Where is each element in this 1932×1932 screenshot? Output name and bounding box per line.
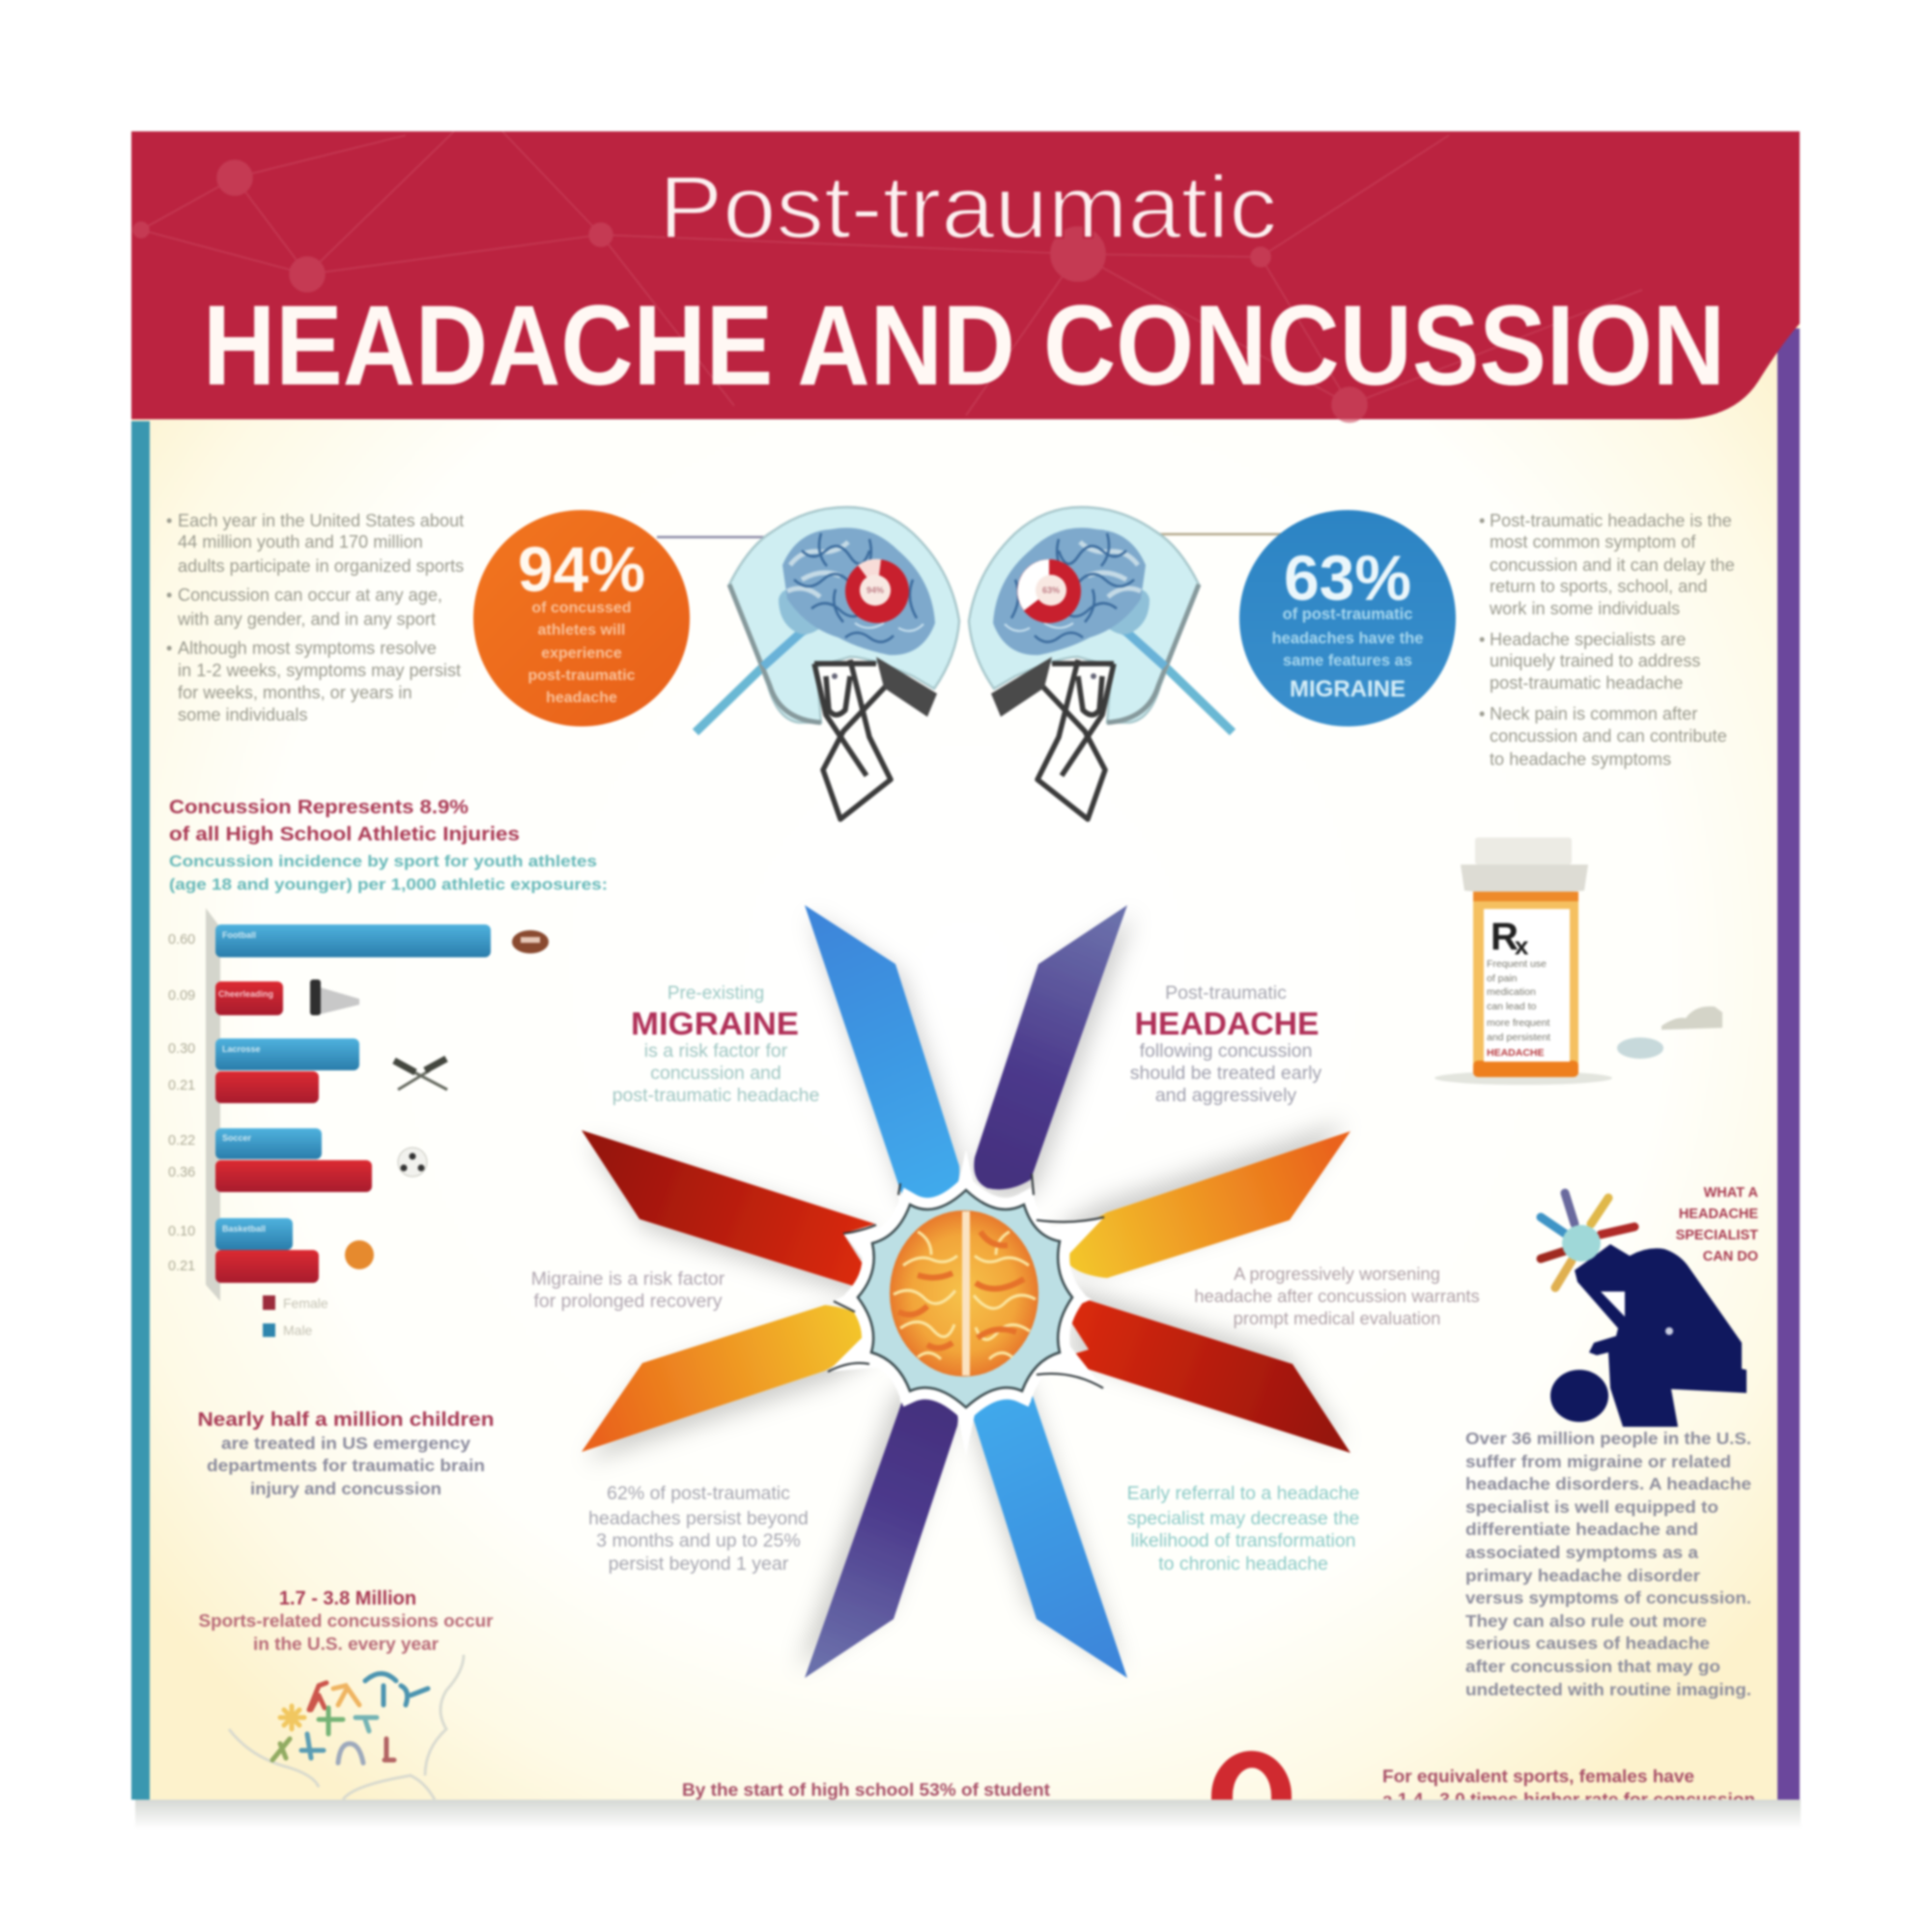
label text: medication (1487, 986, 1536, 998)
left bullet list: • (166, 585, 172, 605)
ray: right orange (1065, 1131, 1350, 1278)
title: Post-traumatic (659, 158, 1277, 257)
text: pre-existing migraine: Pre-existing (668, 983, 764, 1004)
text: post-traumatic headache (1130, 982, 1321, 1106)
right helmet donut 63%: 63% (1042, 585, 1060, 595)
small burst rays (1541, 1193, 1634, 1288)
orange stat circle: of concussed (531, 600, 632, 616)
text: prolonged recovery: for prolonged recovery (533, 1291, 723, 1312)
bar names: Cheerleading (218, 989, 273, 999)
blue stat circle (1239, 510, 1456, 726)
left bullet list: • (166, 511, 172, 530)
ray: right red (1057, 1295, 1350, 1453)
bar names: Basketball (222, 1224, 266, 1234)
right helmet with brain (969, 507, 1233, 819)
bottom text: females: a 1.4 - 3.0 times higher rate for concussion (1382, 1790, 1755, 1809)
burst (828, 1150, 1104, 1456)
text: persistence: 3 months and up to 25% (596, 1530, 801, 1551)
text: early referral: Early referral to a headache (1127, 1483, 1359, 1504)
left bullet list: with any gender, and in any sport (177, 610, 436, 629)
value labels: 0.22 (168, 1133, 195, 1149)
text: 1.7 to 3.8 million: in the U.S. every year (253, 1634, 439, 1654)
right bullet list: concussion and it can delay the (1490, 555, 1735, 575)
specialist paragraph: headache disorders. A headache (1465, 1474, 1751, 1493)
left bullet list: • (166, 639, 172, 658)
blue stat circle: headaches have the (1272, 630, 1423, 647)
orange stat circle (473, 510, 690, 726)
right bullet list: • (1479, 704, 1485, 724)
label text: more frequent (1487, 1017, 1549, 1029)
bar names: Lacrosse (222, 1044, 261, 1054)
value labels: 0.21 (168, 1259, 195, 1274)
star diagram (582, 905, 1350, 1678)
right bullet list: • (1479, 630, 1485, 649)
right bullet list: Post-traumatic headache is the (1490, 511, 1732, 530)
chart axis (206, 908, 220, 1301)
right bullet list (1479, 511, 1735, 769)
right bullet list: return to sports, school, and (1490, 577, 1707, 596)
ray: upper-right purple (974, 905, 1127, 1189)
text: worsening headache: headache after concussion warrants (1194, 1286, 1480, 1306)
right bullet list: to headache symptoms (1490, 750, 1671, 769)
blue stat circle: same features as (1283, 652, 1412, 669)
left helmet donut 94% (845, 559, 909, 623)
right helmet donut 63% (1017, 559, 1081, 623)
text: persistence: 62% of post-traumatic (607, 1483, 790, 1504)
text: persistence (588, 1483, 809, 1575)
left bullet list: in 1-2 weeks, symptoms may persist (178, 661, 461, 680)
label text (1487, 958, 1550, 1059)
text: half a million children: injury and concussion (250, 1479, 441, 1498)
bottom text: high school: By the start of high school 53% of student (682, 1780, 1050, 1800)
left bullet list: some individuals (178, 705, 307, 724)
right bullet list: work in some individuals (1489, 599, 1680, 618)
left bullet list: for weeks, months, or years in (178, 683, 412, 702)
left teal bar (131, 421, 150, 1800)
bar names: Football (222, 930, 256, 940)
icon: soccer ball (398, 1148, 427, 1177)
text: persistence: headaches persist beyond (588, 1508, 809, 1529)
label text: and persistent (1487, 1032, 1550, 1043)
specialist paragraph: differentiate headache and (1465, 1520, 1698, 1539)
bottom text: females (1382, 1767, 1755, 1809)
panel shadow (135, 1800, 1801, 1829)
text: half a million children: Nearly half a million children (197, 1409, 495, 1431)
text: 1.7 to 3.8 million (199, 1588, 493, 1654)
athlete figures (272, 1673, 428, 1763)
title (208, 172, 1720, 387)
icon: lacrosse sticks (394, 1059, 447, 1090)
ray: lower-left purple (805, 1394, 958, 1678)
bar chart (168, 908, 549, 1338)
right bullet list: • (1479, 511, 1485, 530)
text: post-traumatic headache: and aggressively (1155, 1085, 1296, 1106)
text: half a million children: departments for traumatic brain (207, 1456, 485, 1475)
right bullet list: Neck pain is common after (1490, 704, 1697, 724)
text: pre-existing migraine: post-traumatic headache (612, 1085, 819, 1106)
bars (215, 924, 491, 1283)
specialist paragraph: primary headache disorder (1465, 1566, 1700, 1585)
right bullet list: uniquely trained to address (1490, 651, 1700, 670)
text: pre-existing migraine: concussion and (650, 1063, 781, 1084)
text: half a million children: are treated in US emergency (221, 1434, 470, 1453)
text: pre-existing migraine (612, 983, 819, 1106)
specialist heading (1676, 1185, 1759, 1264)
ray: left orange (582, 1305, 867, 1452)
label text: can lead to (1487, 1001, 1537, 1012)
icon: silhouette with headache burst (1541, 1193, 1747, 1427)
header network pattern (133, 131, 1642, 422)
text: persistence: persist beyond 1 year (609, 1553, 789, 1575)
specialist paragraph: after concussion that may go (1465, 1657, 1720, 1676)
specialist paragraph (1465, 1429, 1751, 1699)
header banner (131, 131, 1800, 419)
right bullet list: most common symptom of (1490, 532, 1696, 552)
right bullet list: Headache specialists are (1490, 630, 1686, 649)
specialist paragraph: associated symptoms as a (1465, 1543, 1698, 1562)
right purple bar (1777, 328, 1800, 1800)
left bullet list: 44 million youth and 170 million (178, 532, 423, 552)
value labels: 0.36 (168, 1165, 195, 1180)
text: early referral: likelihood of transformation (1130, 1530, 1356, 1551)
text: prolonged recovery: Migraine is a risk factor (531, 1268, 725, 1290)
value labels (168, 932, 195, 1274)
text: post-traumatic headache: following concussion (1140, 1040, 1312, 1062)
label text: of pain (1487, 973, 1518, 984)
left bullet list: Concussion can occur at any age, (178, 585, 442, 605)
left bullet list: Each year in the United States about (178, 511, 464, 530)
specialist paragraph: They can also rule out more (1465, 1611, 1707, 1631)
value labels: 0.09 (168, 988, 195, 1004)
icon: football (512, 930, 549, 953)
brain (890, 1210, 1038, 1377)
text: early referral: specialist may decrease the (1127, 1508, 1359, 1529)
ray: left red (582, 1130, 875, 1288)
specialist paragraph: specialist is well equipped to (1465, 1497, 1719, 1517)
value labels: 0.30 (168, 1041, 195, 1057)
Rx mark: x (1515, 931, 1529, 960)
specialist heading: WHAT A (1704, 1185, 1759, 1201)
poster panel (131, 131, 1800, 1809)
right bullet list: post-traumatic headache (1490, 673, 1683, 693)
left helmet with brain (696, 507, 959, 819)
icon: megaphone (310, 980, 359, 1015)
specialist heading: CAN DO (1703, 1249, 1758, 1264)
chart legend (263, 1295, 328, 1338)
orange stat circle: 94% (518, 533, 645, 605)
left bullet list: adults participate in organized sports (178, 556, 464, 576)
pills (1617, 1007, 1722, 1059)
bottom text: females: For equivalent sports, females have (1382, 1767, 1694, 1786)
blue stat circle: 63% (1284, 542, 1411, 613)
ray: lower-right blue (973, 1381, 1127, 1678)
text: early referral (1127, 1483, 1359, 1575)
text: pre-existing migraine: is a risk factor for (644, 1040, 788, 1062)
chart legend: Female (283, 1295, 328, 1311)
left bullet list (166, 511, 464, 724)
label text: Frequent use (1487, 958, 1547, 970)
orange stat circle: headache (546, 690, 617, 706)
pill bottle (1435, 838, 1612, 1085)
bar names (218, 930, 273, 1234)
title: HEADACHE AND CONCUSSION (203, 282, 1725, 410)
chart heading: of all High School Athletic Injuries (169, 824, 520, 845)
orange stat circle: post-traumatic (527, 668, 636, 684)
specialist paragraph: Over 36 million people in the U.S. (1465, 1429, 1751, 1448)
specialist heading: HEADACHE (1679, 1207, 1758, 1222)
icon: basketball (345, 1240, 374, 1269)
bottle label (1484, 909, 1570, 1062)
text: post-traumatic headache: Post-traumatic (1165, 982, 1287, 1004)
specialist heading: SPECIALIST (1676, 1228, 1758, 1243)
text: prolonged recovery (531, 1268, 725, 1312)
text: early referral: to chronic headache (1158, 1553, 1328, 1575)
text: post-traumatic headache: HEADACHE (1134, 1006, 1320, 1041)
specialist paragraph: undetected with routine imaging. (1465, 1680, 1751, 1699)
specialist paragraph: suffer from migraine or related (1465, 1452, 1731, 1471)
text: worsening headache: prompt medical evaluation (1234, 1308, 1440, 1328)
chart heading: Concussion incidence by sport for youth athletes (169, 852, 597, 870)
value labels: 0.10 (168, 1224, 195, 1239)
text: pre-existing migraine: MIGRAINE (631, 1006, 799, 1041)
value labels: 0.60 (168, 932, 195, 948)
text: worsening headache: A progressively worsening (1234, 1264, 1440, 1284)
chart heading: (age 18 and younger) per 1,000 athletic exposures: (169, 875, 608, 894)
orange stat circle: athletes will (538, 622, 625, 639)
orange stat circle: experience (541, 645, 622, 662)
blue stat circle: MIGRAINE (1290, 676, 1406, 702)
label text: HEADACHE (1487, 1047, 1545, 1059)
text: 1.7 to 3.8 million: 1.7 - 3.8 Million (279, 1588, 416, 1609)
Rx mark: R (1491, 916, 1519, 958)
ray: upper-left blue (805, 905, 959, 1202)
text: half a million children (197, 1409, 495, 1498)
value labels: 0.21 (168, 1078, 195, 1094)
text: post-traumatic headache: should be treated early (1130, 1063, 1321, 1084)
right bullet list: concussion and can contribute (1490, 726, 1727, 746)
map outline (229, 1655, 464, 1800)
specialist paragraph: serious causes of headache (1465, 1634, 1710, 1653)
bottom red ring (1211, 1750, 1292, 1800)
text: 1.7 to 3.8 million: Sports-related concussions occur (199, 1611, 493, 1631)
chart heading: Concussion Represents 8.9% (169, 797, 469, 818)
blue stat circle: of post-traumatic (1283, 606, 1412, 623)
connector lines (657, 534, 1289, 537)
left helmet donut 94%: 94% (867, 585, 884, 595)
specialist paragraph: versus symptoms of concussion. (1465, 1588, 1751, 1607)
chart heading (169, 797, 608, 894)
chart legend: Male (283, 1322, 313, 1338)
bar names: Soccer (222, 1133, 252, 1143)
US map with athletes (229, 1655, 464, 1800)
text: worsening headache (1194, 1264, 1480, 1328)
left bullet list: Although most symptoms resolve (178, 639, 437, 658)
